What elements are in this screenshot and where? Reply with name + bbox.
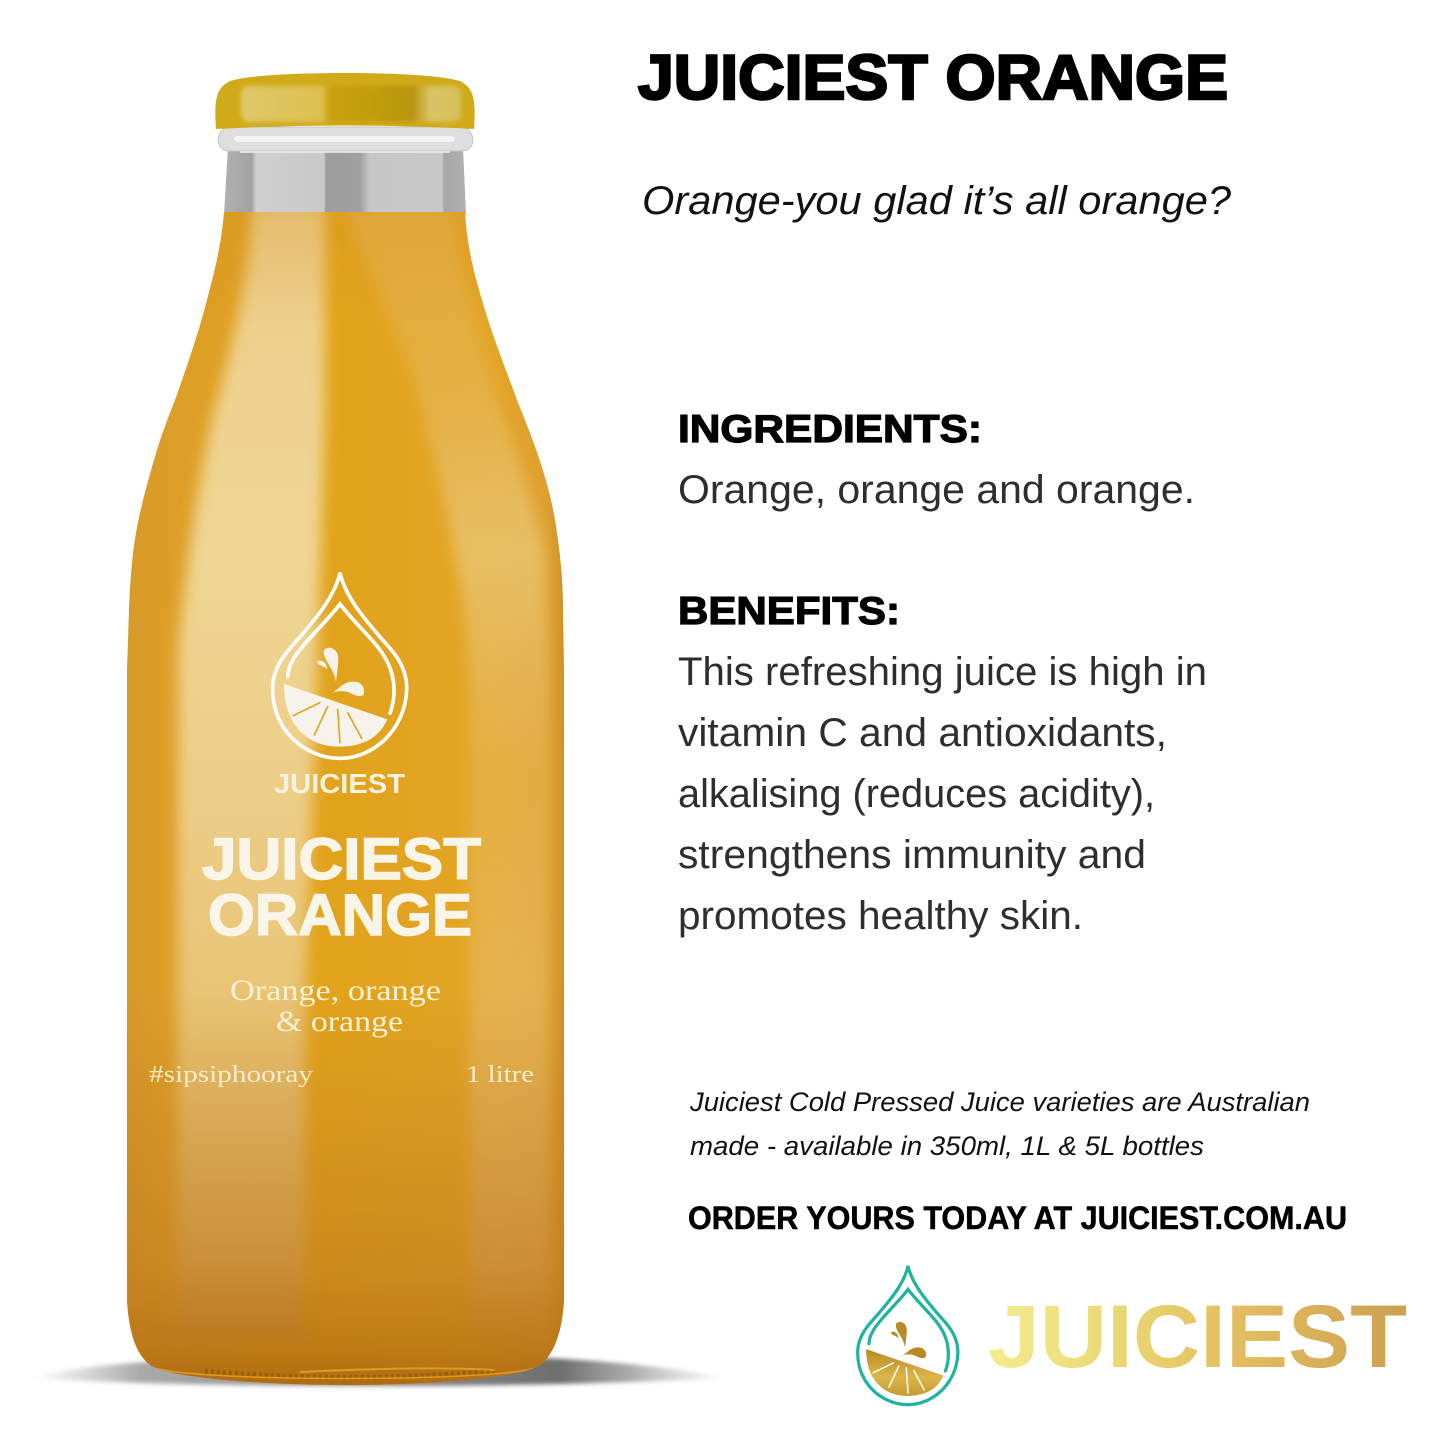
ingredients text: Orange, orange and orange. [678,468,1195,512]
bottle label product name [202,827,481,948]
benefits text: alkalising (reduces acidity), [678,772,1155,816]
ingredients heading: INGREDIENTS: [678,408,982,451]
benefits text [678,650,1207,938]
bottle label ingredients: & orange [276,1005,403,1038]
call to action: ORDER YOURS TODAY AT JUICIEST.COM.AU [688,1200,1347,1236]
benefits heading: BENEFITS: [678,590,900,633]
benefits text: This refreshing juice is high in [678,650,1207,694]
bottle label footer: 1 litre [466,1062,534,1088]
bottle illustration [30,73,730,1390]
icon: juice drop with orange slice [858,1266,958,1405]
bottle label footer [149,1062,534,1088]
brand logo [858,1266,1407,1405]
glass neck [224,148,466,214]
availability note: made - available in 350ml, 1L & 5L bottles [690,1131,1204,1161]
bottle label product name: JUICIEST [202,827,481,892]
bottle label footer: #sipsiphooray [149,1062,313,1088]
bottle ground shadow [30,1358,730,1386]
tagline: Orange-you glad it’s all orange? [642,179,1232,223]
bottle label ingredients: Orange, orange [230,974,441,1007]
gold wordmark: JUICIEST [988,1286,1407,1386]
bottle label ingredients [230,974,441,1038]
availability note [689,1087,1310,1161]
benefits text: strengthens immunity and [678,833,1146,877]
juice body [120,205,570,1390]
benefits text: vitamin C and antioxidants, [678,711,1167,755]
benefits text: promotes healthy skin. [678,894,1083,938]
bottle label logo [273,573,407,758]
bottle label product name: ORANGE [208,883,472,948]
glass rim [218,127,473,152]
title: JUICIEST ORANGE [638,43,1228,113]
bottle cap [215,73,475,129]
bottle label brand: JUICIEST [274,768,405,799]
availability note: Juiciest Cold Pressed Juice varieties are Australian [689,1087,1310,1117]
